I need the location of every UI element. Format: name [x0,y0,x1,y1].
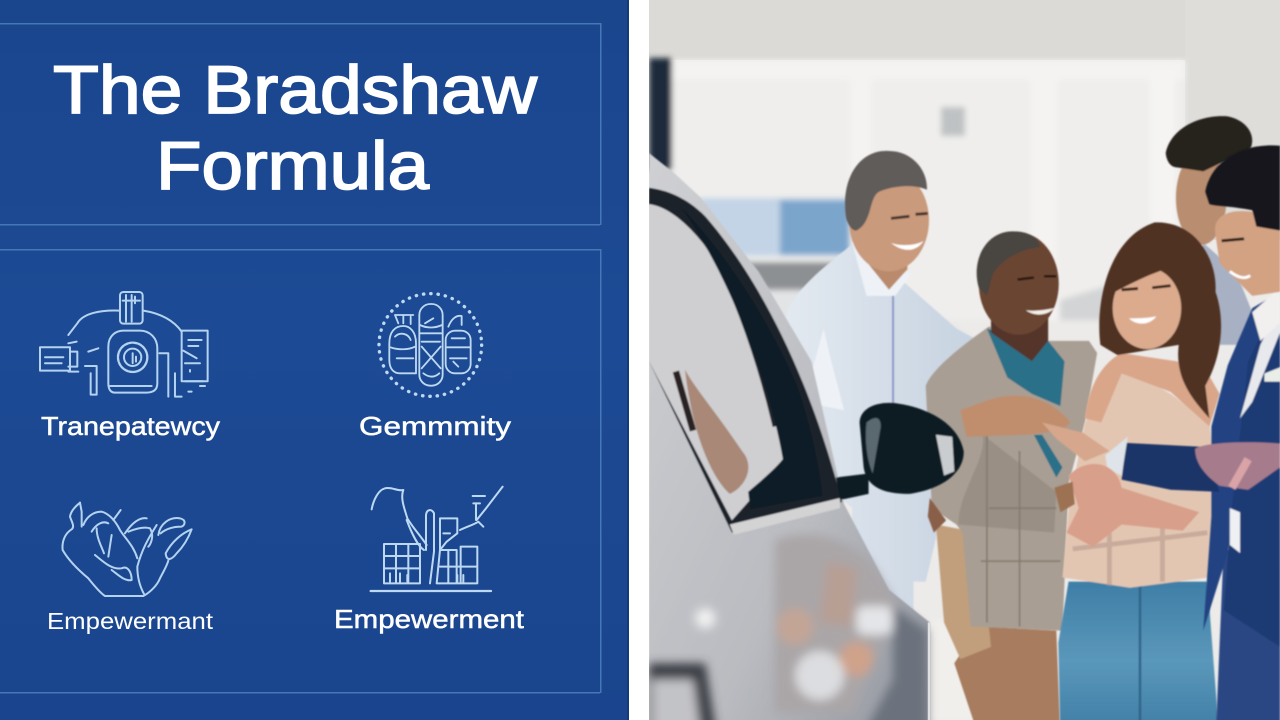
label: Empowerment right: Empewerment [334,604,525,634]
person: front man in navy suit [1105,145,1280,720]
car reflections [649,534,928,720]
person: back man in striped shirt [1166,116,1252,345]
title [53,52,538,204]
showroom background [649,0,1280,720]
icon: city growth [371,487,503,591]
title: The Bradshaw [53,52,538,128]
label: Community: Gemmmity [359,411,511,441]
person: woman with brown hair [1058,222,1221,720]
photo: dealership handover scene [649,0,1280,720]
title: Formula [156,128,429,204]
label: Transparency: Tranepatewcy [41,411,220,441]
icon: transparency machine diagram [40,292,208,397]
person: man in light blue shirt [785,151,979,720]
hands exchanging keys [928,396,1199,547]
person: man in grey plaid jacket [926,231,1097,720]
people and car in zoom coordinates [649,116,1280,720]
label: Empowerment left: Empewermant [47,608,214,634]
car edge [926,622,932,720]
car [649,153,964,720]
icon: empowerment hands [62,503,192,596]
panel: blue formula panel [0,0,629,720]
icon: community medallion [379,294,482,396]
